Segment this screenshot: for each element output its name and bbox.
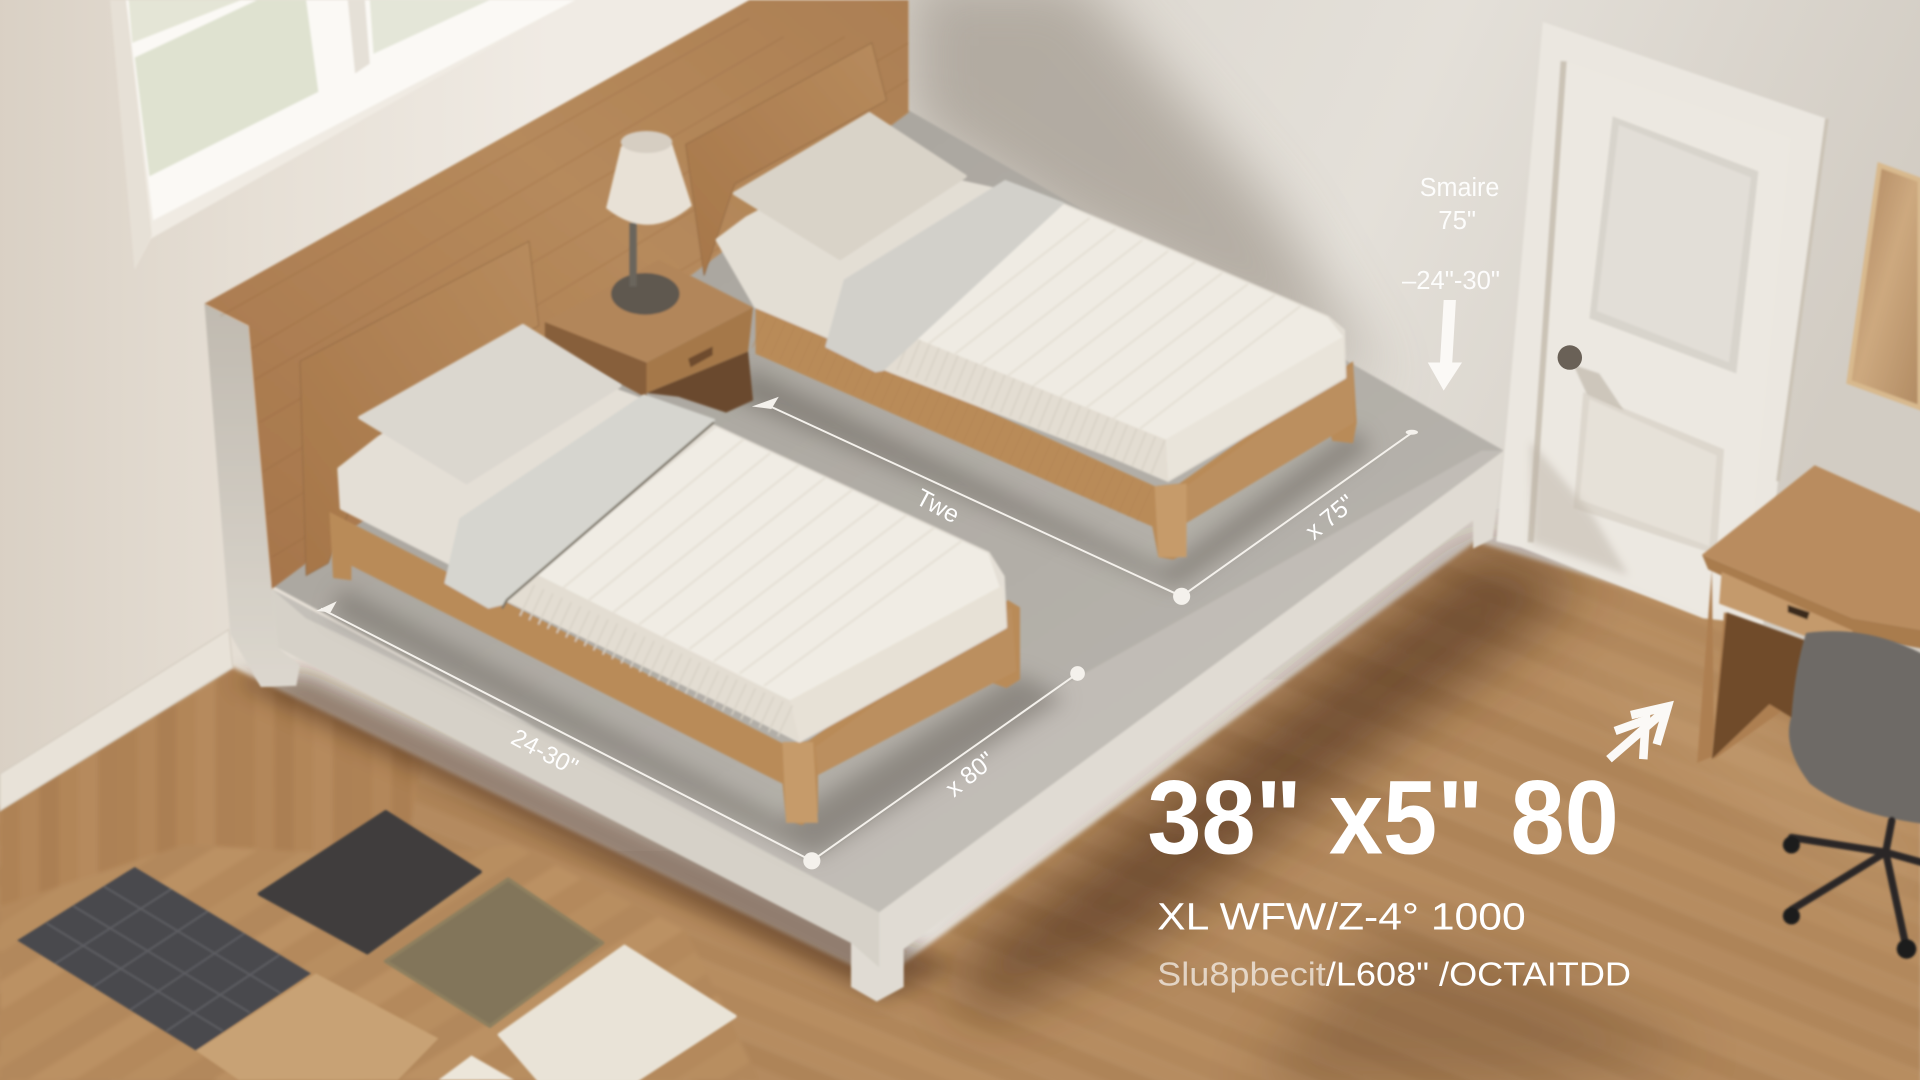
front bed frame [329, 512, 1020, 825]
swatch: tan [196, 973, 438, 1080]
wall label: 75: 75" [1438, 207, 1476, 235]
swatch: small cream [438, 1056, 514, 1080]
back bed frame [756, 306, 1357, 560]
wood floor [0, 541, 1920, 1080]
window [110, 0, 576, 269]
headline dimensions: 38" x5" 80 [1147, 759, 1619, 876]
arrow: double up-right [1609, 707, 1668, 759]
subtitle: line one: XL WFW/Z-4° 1000 [1157, 896, 1526, 938]
door knob [1558, 345, 1624, 410]
dimension label: 24-30: 24-30" [507, 724, 582, 781]
back bed mattress [718, 159, 1344, 480]
bed: back [718, 114, 1357, 560]
wall label: 24-30: –24"-30" [1402, 267, 1500, 295]
dimension label: Twe: Twe [911, 484, 964, 529]
back bed pillow [735, 114, 965, 258]
subtitle: line two: Slu8pbecit /L608" /OCTAITDD [1157, 957, 1631, 994]
desk [1697, 465, 1920, 763]
office chair [1783, 631, 1920, 959]
fabric swatches [17, 812, 735, 1080]
bed: front [329, 326, 1020, 825]
headboard: front bed [300, 241, 539, 576]
swatch: charcoal [260, 812, 480, 953]
mirror [1849, 165, 1920, 408]
front bed pillow [360, 326, 620, 482]
back bed blanket [827, 181, 1063, 371]
arrow: down to floor [1428, 300, 1462, 391]
nightstand with lamp [545, 131, 753, 413]
platform with side faces and legs [204, 110, 1504, 1002]
dimension label: x80: x 80" [941, 747, 1000, 802]
swatch: olive [386, 879, 602, 1026]
floor shadows on platform [331, 367, 1371, 857]
baseboard: left wall [0, 629, 233, 811]
headboard: back bed [686, 43, 887, 276]
door with frame [1496, 22, 1827, 624]
room background walls [0, 0, 1920, 851]
dimension lines [321, 404, 1414, 861]
dimension end markers [316, 397, 1418, 869]
swatch: cream [500, 947, 735, 1080]
front bed mattress [339, 358, 1005, 741]
front bed blanket [446, 396, 714, 609]
swatch: plaid grey [17, 867, 311, 1051]
wall label: Smaire: Smaire [1420, 174, 1499, 202]
dimension label: x75: x 75" [1301, 490, 1360, 545]
wood headboard wall [204, 0, 909, 589]
